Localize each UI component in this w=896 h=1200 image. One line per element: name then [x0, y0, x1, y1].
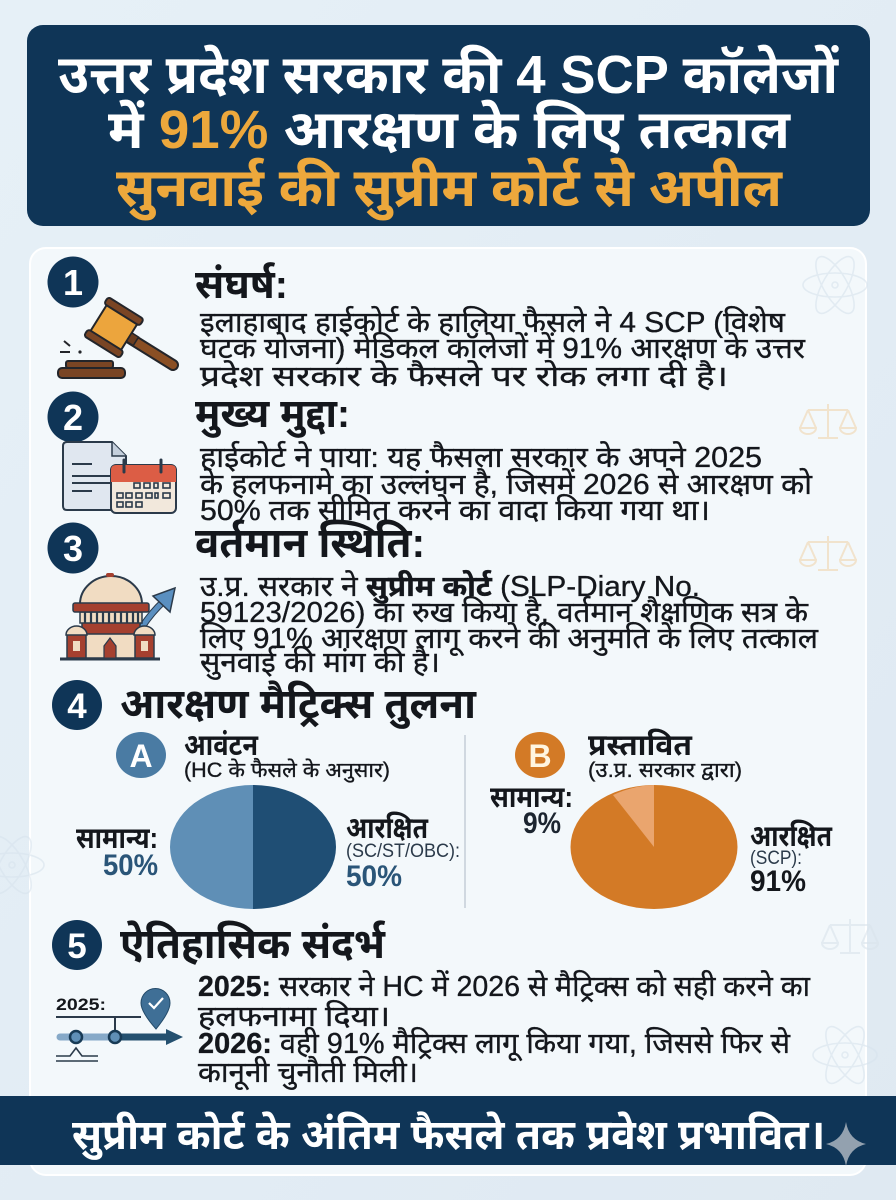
icon: document and calendar	[63, 442, 176, 513]
footer banner: सुप्रीम कोर्ट के अंतिम फैसले तक प्रवेश प्रभावित।	[72, 1111, 825, 1160]
footer banner	[0, 1096, 896, 1165]
label general 9: 9%	[523, 807, 561, 840]
body text 1: घटक योजना) मेडिकल कॉलेजों में 91% आरक्षण के उत्तर	[200, 332, 806, 365]
title banner: में 91% आरक्षण के लिए तत्काल	[108, 99, 791, 160]
body text 1	[200, 306, 806, 393]
heading: main issue: मुख्य मुद्दा:	[195, 392, 350, 438]
icon: supreme court building with arrow	[60, 573, 175, 659]
label reserved 91	[750, 819, 833, 898]
body text 5: 2026: वही 91% मैट्रिक्स लागू किया गया, जिससे फिर से	[198, 1027, 791, 1061]
body text 3	[200, 570, 819, 680]
section 5: history	[52, 920, 810, 1090]
number badge 4: 4	[67, 687, 87, 726]
number badge 2	[48, 392, 98, 442]
badge B: B	[528, 738, 552, 774]
pie chart A	[170, 785, 336, 909]
title banner: सुनवाई की सुप्रीम कोर्ट से अपील	[116, 157, 783, 222]
label general 50: सामान्य:	[76, 822, 158, 855]
body text 2: के हलफनामे का उल्लंघन है, जिसमें 2026 से आरक्षण को	[200, 468, 812, 501]
number badge 3: 3	[63, 528, 83, 569]
icon: sparkle	[826, 1122, 866, 1166]
section 2	[48, 392, 812, 527]
label reserved 91: 91%	[750, 865, 806, 898]
body text 5: कानूनी चुनौती मिली।	[198, 1056, 418, 1090]
label reserved 50: (SC/ST/OBC):	[346, 841, 460, 862]
label general 9: सामान्य:	[490, 781, 573, 814]
body text 3: लिए 91% आरक्षण लागू करने की अनुमति के लिए तत्काल	[200, 622, 819, 656]
label general 50: 50%	[103, 849, 158, 882]
body text 3: सुनवाई की मांग की है।	[200, 646, 440, 680]
body text 1: प्रदेश सरकार के फैसले पर रोक लगा दी है।	[200, 360, 728, 393]
number badge 1	[48, 256, 98, 308]
title banner: उत्तर प्रदेश सरकार की 4 SCP कॉलेजों	[58, 44, 839, 105]
number badge 4	[52, 680, 102, 730]
body text 3: 59123/2026) का रुख किया है, वर्तमान शैक्षणिक सत्र के	[200, 596, 809, 629]
icon: timeline: 2025:	[56, 995, 106, 1014]
label B heading: प्रस्तावित	[588, 728, 693, 762]
body text 2	[200, 441, 812, 527]
heading: sangharsh: संघर्ष:	[195, 262, 288, 307]
heading: historical context: ऐतिहासिक संदर्भ	[120, 920, 386, 967]
number badge 5	[52, 920, 102, 970]
label general 50	[76, 822, 158, 882]
section 4: comparison	[52, 680, 833, 909]
number badge 5: 5	[67, 927, 87, 966]
body text 3: उ.प्र. सरकार ने सुप्रीम कोर्ट (SLP-Diary No.	[200, 570, 700, 604]
main white panel	[30, 248, 866, 1175]
heading: current status: वर्तमान स्थिति:	[195, 519, 425, 566]
badge A: A	[129, 738, 153, 774]
divider	[464, 735, 466, 908]
label reserved 50: आरक्षित	[346, 811, 429, 845]
label A heading: आवंटन	[184, 729, 258, 762]
decorative science and justice icons	[0, 251, 878, 1089]
number badge 1: 1	[63, 262, 83, 303]
pie chart B	[570, 785, 738, 909]
body text 5: हलफनामा दिया।	[198, 1000, 390, 1033]
label reserved 50: 50%	[346, 860, 402, 893]
badge B	[515, 732, 565, 778]
body text 1: इलाहाबाद हाईकोर्ट के हालिया फैसले ने 4 SCP (विशेष	[200, 306, 786, 339]
panel B	[490, 728, 833, 909]
label A subheading: (HC के फैसले के अनुसार)	[184, 757, 390, 783]
label reserved 91: आरक्षित	[750, 819, 833, 853]
label general 9	[490, 781, 573, 840]
label reserved 50	[346, 811, 460, 893]
body text 2: हाईकोर्ट ने पाया: यह फैसला सरकार के अपने 2025	[200, 441, 762, 474]
badge A	[116, 732, 166, 778]
body text 5: 2025: सरकार ने HC में 2026 से मैट्रिक्स को सही करने का	[198, 970, 810, 1003]
icon: timeline	[56, 989, 183, 1061]
label reserved 91: (SCP):	[750, 848, 802, 869]
number badge 2: 2	[63, 397, 83, 438]
panel A	[76, 729, 460, 909]
number badge 3	[48, 522, 98, 574]
body text 2: 50% तक सीमित करने का वादा किया गया था।	[200, 494, 710, 527]
title banner	[27, 25, 870, 226]
section 1	[48, 256, 806, 393]
body text 5	[198, 970, 810, 1090]
icon: gavel	[58, 297, 173, 378]
heading: matrix comparison: आरक्षण मैट्रिक्स तुलना	[120, 680, 477, 729]
section 3	[48, 519, 819, 680]
label B subheading: (उ.प्र. सरकार द्वारा)	[588, 759, 742, 782]
